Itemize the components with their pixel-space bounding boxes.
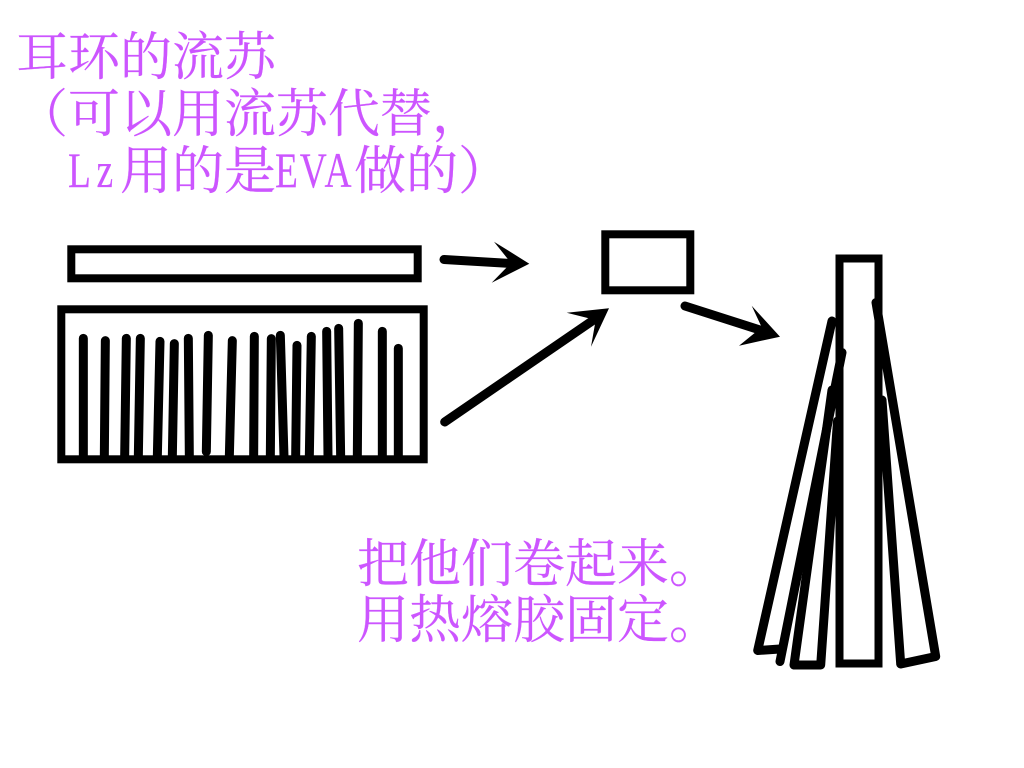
instruction text: roll up and fix with hot glue xyxy=(357,537,721,650)
heading line 3: 用的是 xyxy=(120,144,276,201)
instruction line 2: 用热熔胶固定。 xyxy=(357,593,721,650)
central roll xyxy=(840,258,878,664)
arrow: small piece to finished tassel xyxy=(685,306,780,346)
fringe frame xyxy=(61,309,424,459)
small cut rectangle xyxy=(605,234,690,290)
arrow: fringe to small piece xyxy=(445,308,609,422)
left outer fringe xyxy=(758,321,832,650)
finished rolled tassel xyxy=(758,258,936,665)
fringe lines xyxy=(83,323,398,457)
heading line 2: （可以用流苏代替， xyxy=(16,87,484,144)
right fringe xyxy=(876,302,936,664)
heading line 1: 耳环的流苏 xyxy=(16,30,278,87)
heading line 3: 做的） xyxy=(354,144,510,201)
left inner fringe xyxy=(794,390,838,665)
heading line 3: Lz xyxy=(68,143,113,198)
top strip of material xyxy=(71,249,418,278)
instruction line 1: 把他们卷起来。 xyxy=(357,537,721,594)
heading line 3 xyxy=(68,143,510,201)
arrow: strip to small piece xyxy=(444,242,529,283)
heading: earring tassel note xyxy=(16,30,510,201)
left second fringe xyxy=(780,352,842,662)
fringed strip with cut tassel lines xyxy=(61,309,424,459)
heading line 3: EVA xyxy=(275,143,352,198)
